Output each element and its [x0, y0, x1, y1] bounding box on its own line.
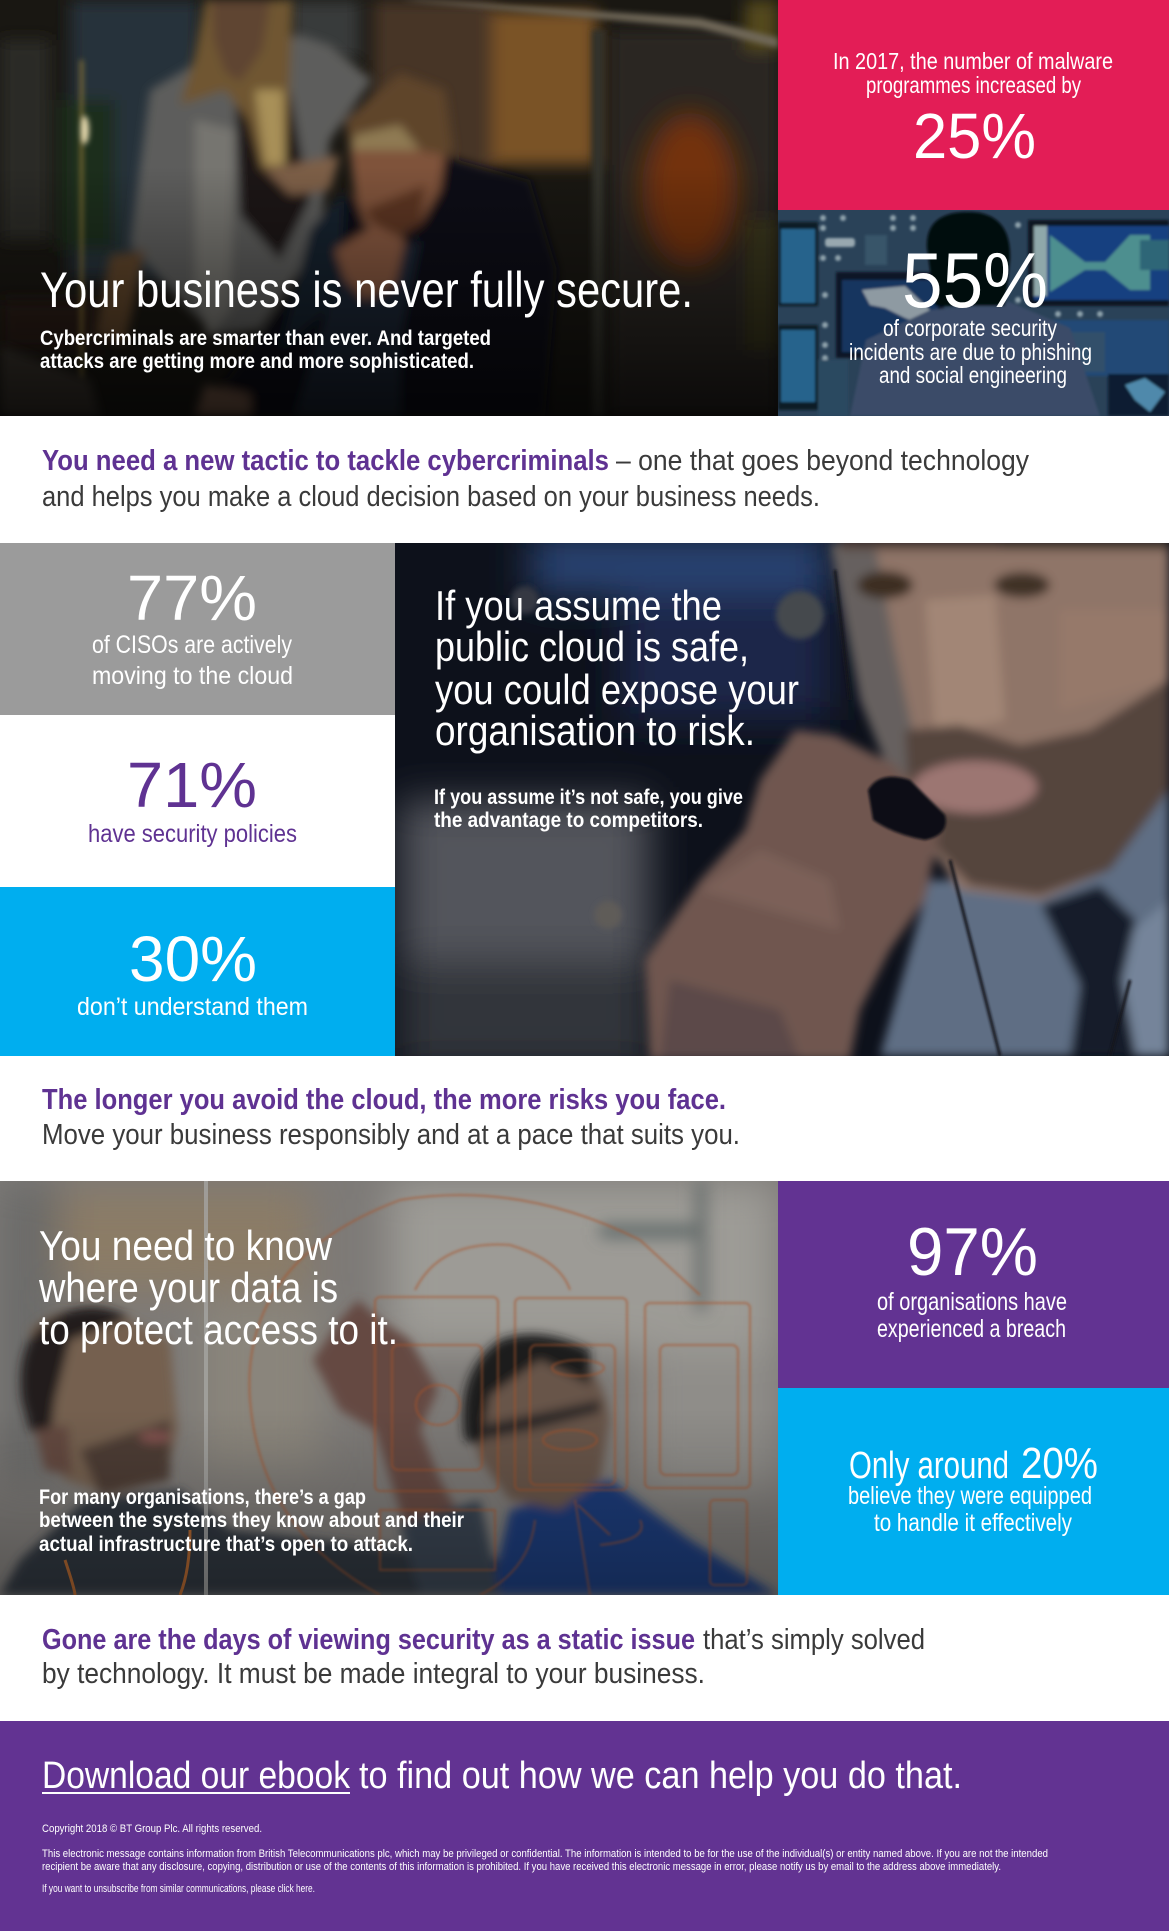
panel: footer [0, 1721, 1169, 1931]
heading [38, 1222, 398, 1353]
stat number: 97% [907, 1214, 1038, 1290]
panel: understanding stat [0, 887, 395, 1056]
stat caption [833, 48, 1113, 98]
jacket of woman [130, 35, 372, 335]
subheading: between the systems they know about and their [39, 1509, 464, 1532]
text block: new tactic: and helps you make a cloud decision based on your business needs. [42, 481, 820, 513]
face [870, 543, 1169, 905]
panel: hero [0, 0, 778, 416]
stat headline: 20% [1021, 1439, 1098, 1488]
panel: public cloud risk [395, 535, 1169, 1070]
subheading: Cybercriminals are smarter than ever. And targeted [40, 327, 491, 350]
text block: static issue: that’s simply solved [703, 1624, 925, 1656]
text block: longer you avoid: The longer you avoid the cloud, the more risks you face. [42, 1084, 726, 1116]
heading: organisation to risk. [435, 707, 755, 754]
stat caption: to handle it effectively [874, 1509, 1072, 1537]
call to action: Download our ebook [42, 1755, 351, 1797]
legal notice: recipient be aware that any disclosure, copying, distribution or use of the contents of this information is prohibited. If you have received this electronic message in error, please notify us by email to the address above immediately. [42, 1861, 1001, 1873]
stat number: 55% [902, 236, 1048, 324]
man hair and face [345, 73, 453, 165]
stat caption: incidents are due to phishing [849, 339, 1092, 365]
text block: new tactic [42, 445, 1029, 513]
photo: analyst at monitors [778, 210, 1169, 416]
hair and face [180, 0, 293, 170]
microphone [868, 777, 946, 840]
heading [435, 582, 799, 754]
stat caption: have security policies [88, 820, 297, 848]
stat caption: of corporate security [883, 315, 1057, 341]
legal notice: This electronic message contains information from British Telecommunications plc, which may be privileged or confidential. The information is intended to be for the use of the individual(s) or entity named above. If you are not the intended [42, 1848, 1048, 1860]
text block: static issue [42, 1624, 925, 1690]
heading: public cloud is safe, [435, 623, 749, 670]
subheading: If you assume it’s not safe, you give [434, 786, 743, 809]
subheading: actual infrastructure that’s open to attack. [39, 1533, 413, 1556]
eyes and brows [840, 540, 1000, 550]
heading: to protect access to it. [39, 1306, 398, 1353]
call to action: to find out how we can help you do that. [359, 1755, 962, 1797]
heading: Your business is never fully secure. [40, 262, 693, 318]
unsubscribe note: If you want to unsubscribe from similar communications, please click here. [42, 1883, 315, 1895]
hand [645, 730, 940, 1060]
stat number: 71% [127, 749, 257, 821]
heading: If you assume the [435, 582, 722, 629]
hero photo: two colleagues at a desk [0, 0, 778, 416]
panel: CISOs stat [0, 543, 395, 715]
panel: know your data [0, 1181, 778, 1595]
panel: breach stat [778, 1181, 1169, 1388]
stat caption: and social engineering [879, 362, 1067, 388]
stat number: 25% [913, 100, 1036, 172]
stat number: 77% [127, 562, 257, 634]
text block: new tactic: You need a new tactic to tackle cybercriminals [42, 445, 609, 477]
hand and arm [310, 1298, 457, 1526]
right man [490, 1480, 778, 1595]
photo: man with headset [395, 535, 1169, 1070]
stat number: 30% [129, 923, 257, 995]
heading: where your data is [38, 1264, 338, 1311]
stat caption: In 2017, the number of malware [833, 48, 1113, 74]
stat caption: of CISOs are actively [92, 631, 292, 659]
man body [286, 155, 557, 326]
text block: static issue: by technology. It must be made integral to your business. [42, 1658, 705, 1690]
subheading [40, 327, 491, 373]
subheading: attacks are getting more and more sophisticated. [40, 350, 474, 373]
stat caption: experienced a breach [877, 1315, 1066, 1343]
text block: new tactic: – one that goes beyond technology [616, 445, 1029, 477]
call to action [42, 1755, 962, 1797]
stat caption: programmes increased by [866, 72, 1081, 98]
photo: two men sketching on glass [0, 1181, 778, 1595]
shirt [880, 780, 1169, 1056]
stat caption [848, 1482, 1092, 1537]
stat caption [849, 315, 1092, 388]
panel: malware stat [778, 0, 1169, 210]
stat headline: Only around [849, 1445, 1009, 1487]
text block: longer you avoid [42, 1084, 740, 1151]
panel: security policies stat [0, 715, 395, 887]
stat caption: believe they were equipped [848, 1482, 1092, 1510]
stat caption [92, 631, 293, 690]
legal notice [42, 1848, 1048, 1873]
headset wire [835, 570, 1130, 1056]
whiteboard sketches [249, 1195, 750, 1595]
heading: You need to know [39, 1222, 333, 1269]
text block: static issue: Gone are the days of viewing security as a static issue [42, 1624, 695, 1656]
heading: you could expose your [435, 666, 799, 713]
text block: longer you avoid: Move your business responsibly and at a pace that suits you. [42, 1119, 740, 1151]
stat caption: don’t understand them [77, 993, 308, 1021]
panel: equipped stat [778, 1388, 1169, 1595]
subheading: the advantage to competitors. [434, 809, 703, 832]
stat caption: moving to the cloud [92, 662, 293, 690]
stat caption [877, 1288, 1067, 1343]
left man [0, 1490, 500, 1595]
subheading [434, 786, 743, 832]
subheading [39, 1486, 464, 1556]
stat caption: of organisations have [877, 1288, 1067, 1316]
panel: phishing stat [778, 210, 1169, 416]
beard and mouth [905, 680, 1169, 895]
subheading: For many organisations, there’s a gap [39, 1486, 366, 1509]
copyright: Copyright 2018 © BT Group Plc. All rights reserved. [42, 1823, 262, 1835]
